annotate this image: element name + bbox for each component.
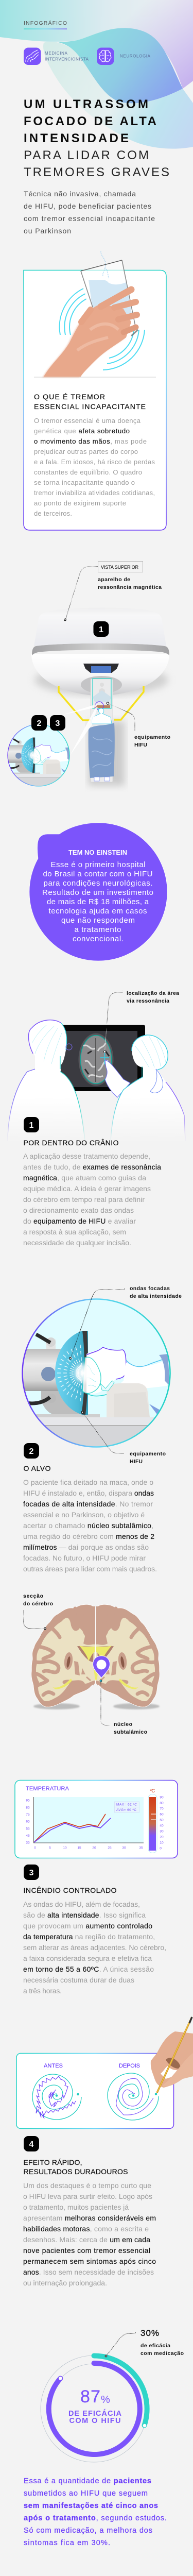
subtitle bbox=[24, 190, 155, 235]
tablet with MRI scan bbox=[61, 1025, 145, 1091]
left doctor bbox=[8, 1020, 85, 1141]
label: depois: DEPOIS bbox=[119, 2063, 140, 2069]
callout: tem no einstein: convencional. bbox=[73, 935, 124, 943]
text block: incêndio controlado: As ondas do HIFU, além de focadas, bbox=[23, 1900, 140, 1908]
text block: incêndio controlado: sem alterar as áreas adjacentes. No cérebro, bbox=[23, 1943, 166, 1952]
badge 1 bbox=[24, 1117, 39, 1132]
heading: efeito rápido: EFEITO RÁPIDO, bbox=[24, 2158, 82, 2166]
icon: tremor waves bbox=[60, 289, 145, 370]
heading: incêndio controlado: INCÊNDIO CONTROLADO bbox=[24, 1886, 117, 1894]
text block: efeito rápido bbox=[23, 2181, 156, 2287]
heading: efeito rápido bbox=[24, 2158, 128, 2176]
footer section bbox=[24, 2477, 167, 2547]
closing statement: sem manifestações até cinco anos bbox=[24, 2502, 158, 2510]
line chart: 15 bbox=[77, 1846, 81, 1850]
section tag: infográfico: INFOGRÁFICO bbox=[24, 20, 67, 26]
ring value text: COM O HIFU bbox=[69, 2417, 120, 2425]
label: medicina intervencionista bbox=[45, 51, 89, 62]
text block: o alvo: HIFU é instalado e, então, dispara ondas bbox=[23, 1489, 154, 1497]
text block: incêndio controlado: que provocam um aumento controlado bbox=[23, 1922, 152, 1930]
detail circle: HIFU zoom bbox=[7, 724, 71, 787]
line chart: 20 bbox=[92, 1846, 96, 1850]
line chart: 5 bbox=[49, 1846, 51, 1850]
text block: efeito rápido: o tratamento, muitos pacientes já bbox=[23, 2203, 129, 2211]
callout line: equipamento bbox=[107, 702, 135, 731]
label: núcleo subtalâmico: núcleo bbox=[114, 1721, 132, 1727]
text block: por dentro do crânio: o direcionamento exato das ondas bbox=[23, 1206, 134, 1214]
heading: o alvo: O ALVO bbox=[24, 1464, 51, 1472]
label: localização da área: via ressonância bbox=[127, 998, 169, 1004]
subtitle: ou Parkinson bbox=[24, 227, 71, 235]
text block: efeito rápido: ou internação prolongada. bbox=[23, 2279, 107, 2287]
text block: incêndio controlado: a faixa considerada segura e efetiva fica bbox=[23, 1954, 152, 1962]
chart title: TEMPERATURA bbox=[26, 1786, 69, 1792]
closing statement bbox=[24, 2477, 167, 2547]
callout line: ondas focadas bbox=[69, 1289, 125, 1359]
label: secção do cérebro: secção bbox=[23, 1593, 43, 1599]
text block: por dentro do crânio: A aplicação desse tratamento depende, bbox=[23, 1152, 150, 1160]
subtitle: Técnica não invasiva, chamada bbox=[24, 190, 136, 198]
text block: o movimento das mãos, mas pode bbox=[34, 437, 147, 445]
text block: se torna incapacitante quando o bbox=[34, 479, 135, 486]
line chart: 75 bbox=[26, 1813, 30, 1817]
spiral: depois bbox=[108, 2073, 159, 2120]
line chart: 65 bbox=[26, 1820, 30, 1824]
label: antes: ANTES bbox=[44, 2063, 63, 2069]
callout: tem no einstein: que não respondem bbox=[61, 916, 135, 925]
closing statement: submetidos ao HIFU que seguem bbox=[24, 2489, 148, 2498]
thermometer scale: 0 bbox=[160, 1846, 162, 1851]
closing statement: Só com medicação, a melhora dos bbox=[24, 2527, 152, 2535]
text block: por dentro do crânio: a resposta à sua aplicação, sem bbox=[23, 1228, 126, 1236]
ring value text: 87 bbox=[80, 2387, 100, 2406]
text block: efeito rápido: apresentam melhoras consideráveis em bbox=[23, 2214, 156, 2222]
purple arc 87% bbox=[49, 2363, 140, 2454]
callout: tem no einstein: a tratamento bbox=[74, 925, 121, 934]
text block: efeito rápido: nove pacientes com tremor essencial bbox=[23, 2246, 150, 2255]
badge 2: 2 bbox=[29, 1447, 34, 1456]
line chart bbox=[26, 1797, 144, 1850]
label: aparelho de ressonância magnética: ressonância magnética bbox=[98, 584, 162, 590]
text block: por dentro do crânio: necessidade de qualquer incisão. bbox=[23, 1239, 131, 1247]
text block: incêndio controlado: a três horas. bbox=[23, 1987, 62, 1995]
badge 2 bbox=[24, 1443, 39, 1459]
thermometer scale: 40 bbox=[160, 1824, 164, 1828]
chart legend bbox=[114, 1802, 139, 1812]
text block: o alvo: essencial e no Parkinson, o objetivo é bbox=[23, 1511, 145, 1519]
header background blobs bbox=[0, 0, 193, 149]
text block: por dentro do crânio: do equipamento de HIFU e avaliar bbox=[23, 1217, 136, 1225]
icon: medicina intervencionista bbox=[24, 47, 41, 65]
label: aparelho de ressonância magnética: aparelho de bbox=[98, 577, 130, 583]
callout: tem no einstein: Resultado de um investimento bbox=[42, 888, 153, 897]
line chart: 35 bbox=[139, 1846, 143, 1850]
badge 4: 4 bbox=[29, 2140, 34, 2149]
illustration: brain section bbox=[31, 1604, 160, 1709]
badge 2 small: 2 bbox=[37, 719, 42, 728]
text block: por dentro do crânio bbox=[23, 1152, 161, 1247]
text block: o alvo: milímetros — daí porque as ondas são bbox=[23, 1543, 149, 1551]
text block bbox=[34, 417, 155, 517]
illustration: hand holding glass bbox=[42, 251, 138, 378]
text block: incêndio controlado bbox=[23, 1900, 166, 1995]
title: UM ULTRASSOM bbox=[24, 97, 148, 111]
text block: efeito rápido: anos. Isso sem necessidade de incisões bbox=[23, 2268, 154, 2276]
label: medicina intervencionista: MEDICINA bbox=[45, 51, 68, 56]
panel: antes e depois spirals bbox=[16, 2017, 193, 2129]
thermometer scale: 30 bbox=[160, 1830, 164, 1833]
left hemisphere bbox=[31, 1604, 95, 1707]
callout line: secção do cérebro bbox=[24, 1610, 46, 1630]
text block: o alvo: outras áreas para lidar com mais quadros. bbox=[23, 1565, 157, 1573]
line chart: 35 bbox=[26, 1841, 30, 1844]
callout line: núcleo subtalâmico bbox=[100, 1680, 110, 1725]
label: secção do cérebro bbox=[23, 1593, 53, 1607]
ring value text: DE EFICÁCIA bbox=[68, 2409, 122, 2418]
right doctor bbox=[105, 1035, 185, 1141]
badge 3 small bbox=[50, 715, 65, 731]
label: vista superior: VISTA SUPERIOR bbox=[101, 565, 139, 570]
callout line: equipamento bbox=[81, 1411, 125, 1453]
label: núcleo subtalâmico: subtalâmico bbox=[114, 1729, 147, 1735]
text block: genética que afeta sobretudo bbox=[34, 427, 130, 435]
thermometer scale: 90 bbox=[160, 1796, 164, 1799]
badge 3 small: 3 bbox=[56, 719, 60, 728]
label: 30% de eficácia com medicação bbox=[141, 2328, 184, 2357]
line chart: 85 bbox=[26, 1806, 30, 1809]
thermometer scale: 50 bbox=[160, 1819, 164, 1822]
teal arc 30% bbox=[94, 2355, 147, 2427]
text block: o alvo: O paciente fica deitado na maca, onde o bbox=[23, 1478, 153, 1486]
chart legend: MAX= 62 ºC bbox=[116, 1803, 137, 1806]
badge 2 small bbox=[31, 715, 47, 731]
label: secção do cérebro: do cérebro bbox=[23, 1601, 53, 1607]
callout: tem no einstein bbox=[29, 823, 167, 961]
section tag: infográfico bbox=[24, 20, 67, 29]
text block: prejudicar outras partes do corpo bbox=[34, 448, 138, 455]
text block: ao ponto de exigirem suporte bbox=[34, 499, 126, 507]
label: equipamento HIFU: equipamento bbox=[130, 1451, 166, 1457]
text block: efeito rápido: permanecem sem sintomas após cinco bbox=[23, 2257, 156, 2265]
text block: por dentro do crânio: equipe médica. A ideia é gerar imagens bbox=[23, 1184, 151, 1193]
text block: efeito rápido: desenhos. Mais: cerca de um em cada bbox=[23, 2235, 150, 2244]
heading bbox=[34, 393, 146, 411]
ring value text: % bbox=[101, 2394, 110, 2405]
text block: constantes de equilíbrio. O quadro bbox=[34, 468, 142, 476]
divider under hand bbox=[34, 377, 156, 378]
label: ondas focadas: de alta intensidade bbox=[130, 1293, 182, 1299]
callout line: 30% bbox=[105, 2332, 135, 2357]
icon: location pin bbox=[93, 1656, 110, 1678]
label: 30% de eficácia com medicação: com medicação bbox=[141, 2350, 184, 2357]
text block: efeito rápido: o HIFU leva para surtir efeito. Logo após bbox=[23, 2192, 152, 2200]
line chart: 45 bbox=[26, 1834, 30, 1838]
label: neurologia: NEUROLOGIA bbox=[120, 54, 151, 59]
text block: incêndio controlado: da temperatura na região do tratamento, bbox=[23, 1933, 155, 1941]
ring value text bbox=[68, 2387, 122, 2425]
detail circle: HIFU applied to the head bbox=[21, 1298, 172, 1449]
panel: temperature chart bbox=[15, 1781, 178, 1858]
line chart: 0 bbox=[34, 1846, 36, 1850]
title bbox=[24, 97, 169, 179]
illustration: hand with pencil bbox=[151, 2017, 193, 2093]
thermometer scale: 80 bbox=[160, 1801, 164, 1805]
text block: O tremor essencial é uma doença bbox=[34, 417, 141, 425]
label: localização da área bbox=[127, 990, 179, 1004]
thermometer scale: 20 bbox=[160, 1835, 164, 1839]
label: equipamento HIFU: HIFU bbox=[134, 742, 147, 748]
line chart: 25 bbox=[108, 1846, 112, 1850]
heading: O QUE É TREMOR bbox=[34, 393, 105, 401]
thermometer scale: 60 bbox=[160, 1812, 164, 1817]
label: equipamento HIFU: HIFU bbox=[130, 1459, 143, 1465]
label: localização da área: localização da área bbox=[127, 990, 179, 996]
closing statement: sintomas fica em 30%. bbox=[24, 2539, 110, 2547]
heading: ESSENCIAL INCAPACITANTE bbox=[34, 402, 146, 411]
thermometer scale bbox=[148, 1788, 164, 1853]
title: PARA LIDAR COM bbox=[24, 148, 149, 162]
badge 1: 1 bbox=[29, 1121, 34, 1130]
badge 3 bbox=[24, 1865, 39, 1880]
thermometer scale: ºC bbox=[150, 1788, 155, 1793]
callout line: localização bbox=[104, 991, 122, 1053]
text block: por dentro do crânio: antes de tudo, de exames de ressonância bbox=[23, 1163, 161, 1171]
text block: por dentro do crânio: magnética, que atuam como guias da bbox=[23, 1174, 146, 1182]
text block: de terceiros. bbox=[34, 510, 72, 517]
label: medicina intervencionista: INTERVENCIONISTA bbox=[45, 57, 89, 62]
text block: incêndio controlado: necessária costuma durar de duas bbox=[23, 1976, 134, 1984]
title: INTENSIDADE bbox=[24, 131, 129, 145]
label: 30% de eficácia com medicação: 30% bbox=[141, 2328, 159, 2338]
heading: por dentro do crânio: POR DENTRO DO CRÂNIO bbox=[24, 1139, 119, 1147]
text block: e a fala. Em idosos, há risco de perdas bbox=[34, 458, 155, 466]
title: TREMORES GRAVES bbox=[24, 165, 169, 179]
badge 1: 1 bbox=[99, 625, 103, 634]
label: 30% de eficácia com medicação: de eficácia bbox=[141, 2343, 170, 2349]
callout: tem no einstein: Esse é o primeiro hospital bbox=[50, 860, 145, 869]
text block: efeito rápido: habilidades motoras, como a escrita e bbox=[23, 2225, 149, 2233]
label: núcleo subtalâmico bbox=[114, 1721, 147, 1735]
chart legend: AVG= 60 ºC bbox=[116, 1808, 136, 1812]
callout: tem no einstein: TEM NO EINSTEIN bbox=[68, 849, 127, 856]
text block: por dentro do crânio: do cérebro em tempo real para definir bbox=[23, 1195, 145, 1204]
badge 3: 3 bbox=[29, 1869, 34, 1877]
text block: o alvo: acertar o chamado núcleo subtalâmico, bbox=[23, 1521, 153, 1530]
label: ondas focadas bbox=[130, 1285, 182, 1299]
callout: tem no einstein: de mais de R$ 18 milhões, a bbox=[47, 897, 149, 906]
text block: tremor inviabiliza atividades cotidianas, bbox=[34, 489, 155, 497]
closing statement: após o tratamento, segundo estudos. bbox=[24, 2514, 167, 2522]
ring chart bbox=[41, 2355, 147, 2462]
line chart: 55 bbox=[26, 1827, 30, 1831]
heading: efeito rápido: RESULTADOS DURADOUROS bbox=[24, 2167, 128, 2176]
badge 1 bbox=[94, 621, 109, 637]
line chart: 30 bbox=[122, 1846, 126, 1850]
label: aparelho de ressonância magnética bbox=[98, 577, 162, 590]
text block: o alvo bbox=[23, 1478, 157, 1573]
label: vista superior bbox=[98, 562, 143, 572]
line chart: 95 bbox=[26, 1799, 30, 1802]
callout: tem no einstein: tecnologia ajuda em casos bbox=[48, 907, 147, 916]
text block: efeito rápido: Um dos destaques é o tempo curto que bbox=[23, 2181, 151, 2190]
callout line: aparelho bbox=[64, 567, 98, 621]
callout: tem no einstein: do Brasil a contar com o HIFU bbox=[43, 870, 152, 878]
label: equipamento HIFU bbox=[130, 1451, 166, 1465]
magnifier beams bbox=[62, 704, 98, 755]
panel: o que é tremor essencial bbox=[24, 251, 166, 530]
text block: o alvo: focadas. No futuro, o HIFU pode mirar bbox=[23, 1554, 146, 1562]
subtitle: de HIFU, pode beneficiar pacientes bbox=[24, 202, 151, 210]
subtitle: com tremor essencial incapacitante bbox=[24, 214, 155, 223]
thermometer scale: 10 bbox=[160, 1841, 164, 1844]
illustration: MRI machine with patient bbox=[31, 608, 169, 786]
label: ondas focadas: ondas focadas bbox=[130, 1285, 170, 1292]
text block: o alvo: uma região do cérebro com menos de 2 bbox=[23, 1532, 154, 1540]
closing statement: Essa é a quantidade de pacientes bbox=[24, 2477, 151, 2485]
line chart: 10 bbox=[63, 1846, 67, 1850]
text block: incêndio controlado: são de alta intensidade. Isso significa bbox=[23, 1911, 146, 1919]
label: equipamento HIFU bbox=[134, 734, 170, 748]
thermometer scale: 70 bbox=[160, 1807, 164, 1810]
label: equipamento HIFU: equipamento bbox=[134, 734, 170, 740]
illustration: doctors viewing tablet bbox=[0, 1020, 193, 1143]
spiral: antes bbox=[32, 2074, 81, 2120]
badge 4 bbox=[24, 2136, 39, 2151]
text block: o alvo: focadas de alta intensidade. No tremor bbox=[23, 1500, 153, 1508]
icon: neurologia brain bbox=[97, 47, 114, 65]
text block: incêndio controlado: em torno de 55 a 60ºC. A única sessão bbox=[23, 1965, 154, 1973]
callout: tem no einstein: para condições neurológicas. bbox=[43, 879, 152, 888]
title: FOCADO DE ALTA bbox=[24, 114, 156, 128]
